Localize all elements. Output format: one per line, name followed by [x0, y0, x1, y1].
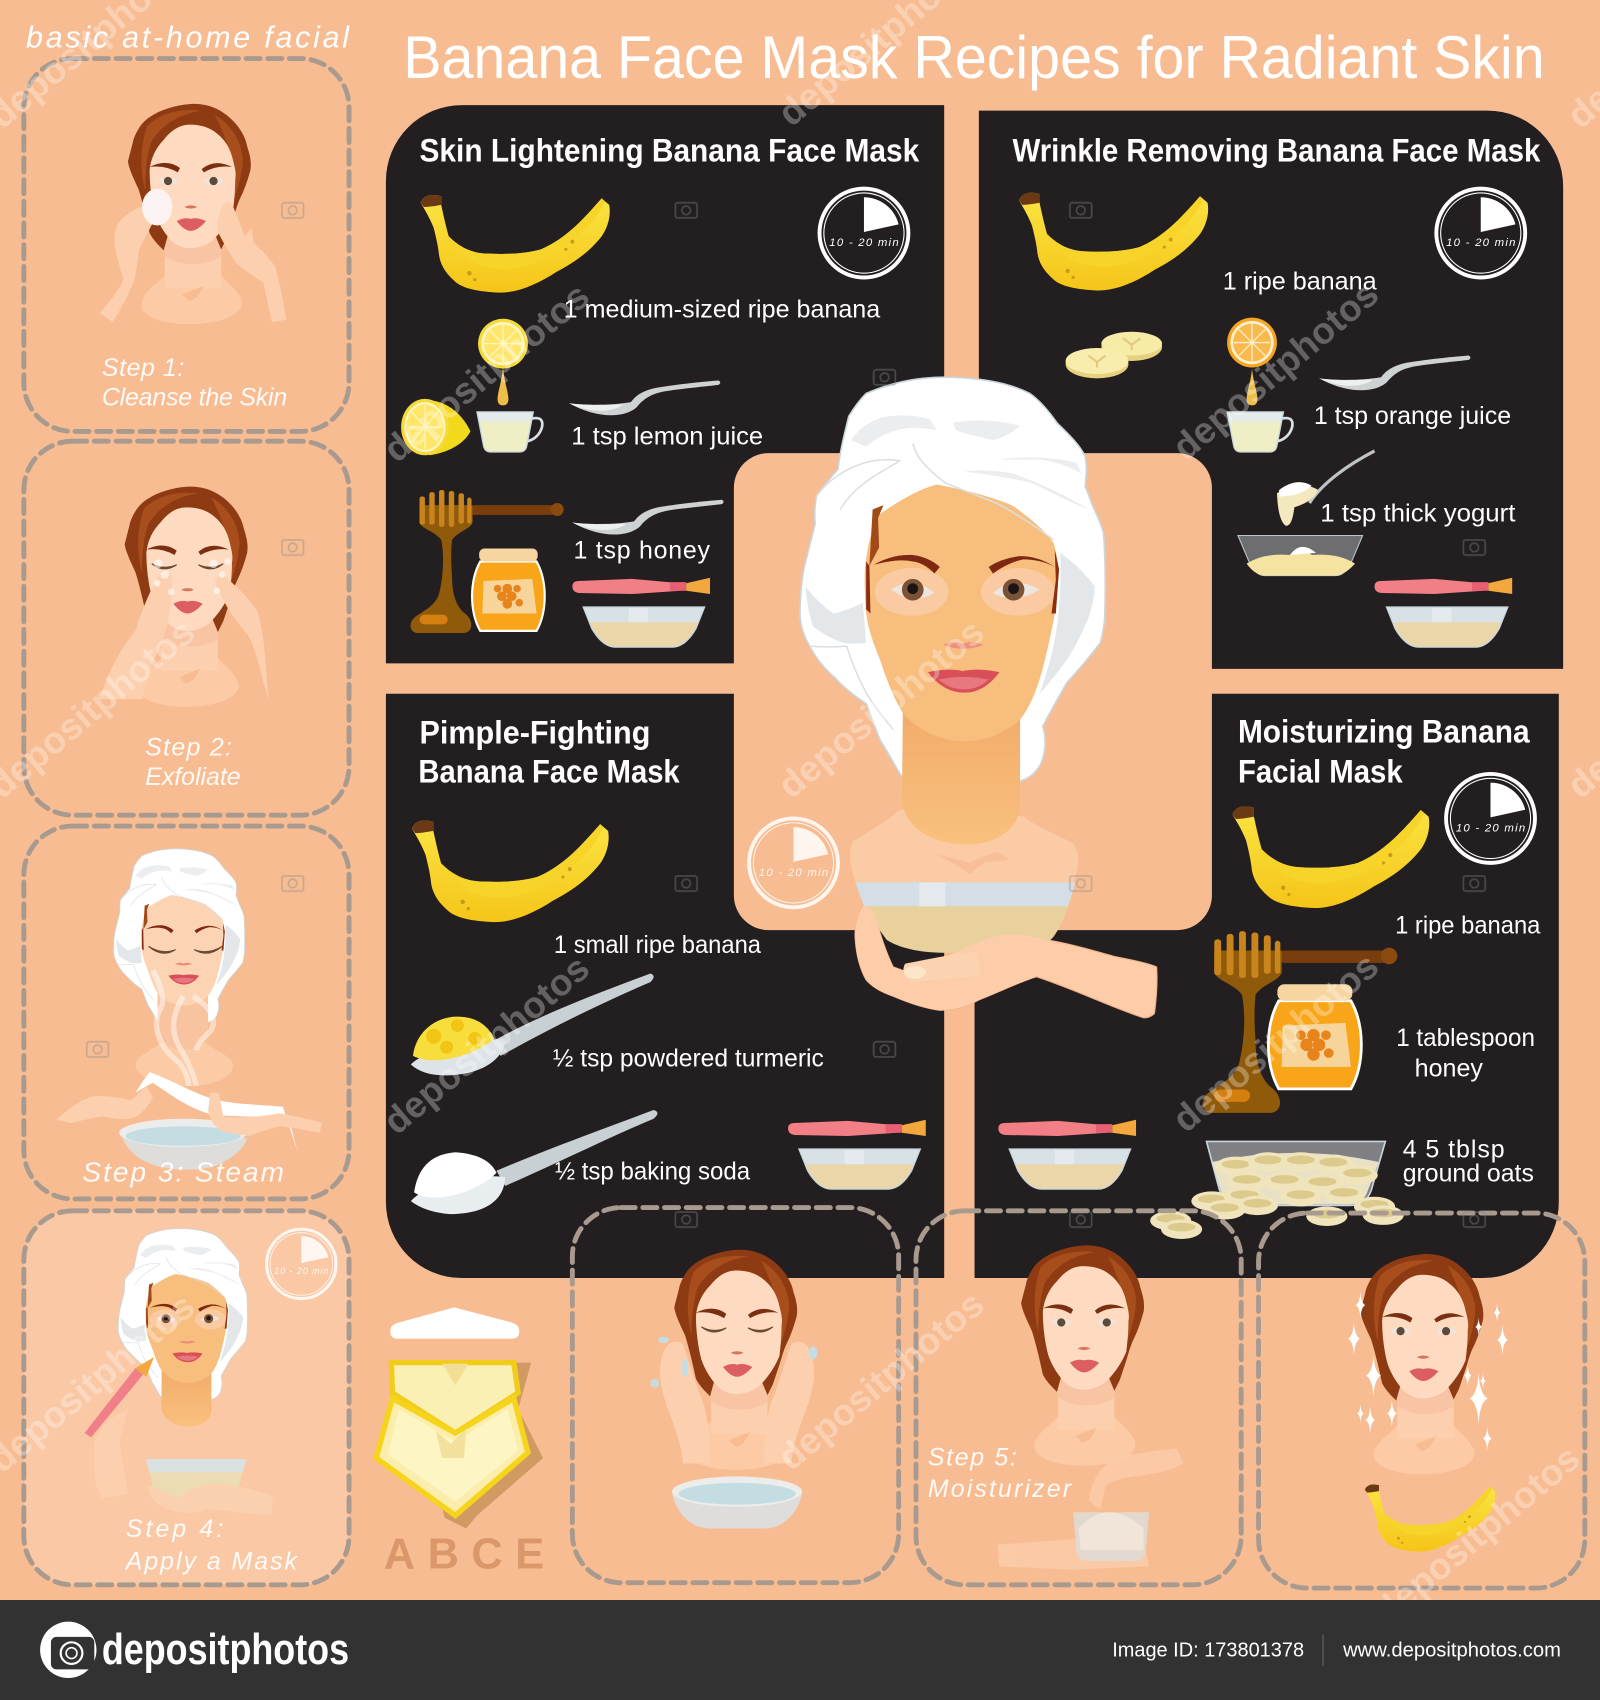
- icon: spoon: [572, 500, 724, 534]
- step 1 label: Step 1:: [102, 354, 184, 382]
- icon: spoon: [1319, 356, 1470, 390]
- moisturizer hand and jar: [997, 1448, 1184, 1570]
- step 4 label: Step 4:: [126, 1515, 223, 1543]
- watermarks: depositphotos: [1165, 945, 1386, 1140]
- step 4 towel: [118, 1229, 248, 1400]
- heading: moisturizing: [1238, 714, 1530, 790]
- image id: Image ID: 173801378: [1112, 1639, 1304, 1661]
- panel: moisturizing mask: [975, 694, 1559, 1278]
- lower slice pith: [388, 1409, 518, 1501]
- water bowl: [119, 1110, 273, 1170]
- top slice: [391, 1363, 518, 1433]
- water drops: [650, 1337, 817, 1388]
- heading: moisturizing: Moisturizing Banana: [1238, 714, 1530, 750]
- neck: [902, 694, 1020, 844]
- watermarks: depositphotos: [770, 611, 992, 806]
- step 2 label: Exfoliate: [145, 763, 241, 791]
- logo text: depositphotos: [102, 1626, 349, 1674]
- icon: orange juice: [1227, 318, 1292, 452]
- slice shadow: [412, 1363, 543, 1528]
- steam: [153, 970, 213, 1086]
- step 1 card: [24, 59, 349, 431]
- heading: pimple-fighting: Pimple-Fighting: [420, 715, 650, 751]
- eyes: [891, 579, 1040, 601]
- step 2 hands: [100, 569, 269, 699]
- icon: banana: [421, 195, 610, 293]
- nose and lips: [928, 642, 999, 693]
- heading: pimple-fighting: Banana Face Mask: [418, 754, 680, 790]
- face: [865, 485, 1058, 741]
- icon: bowl: [1386, 607, 1508, 647]
- icon: banana: [1019, 193, 1208, 291]
- step 3 face: [141, 895, 225, 1005]
- panel: skin lightening mask: [386, 105, 944, 663]
- rinse hands: [660, 1342, 814, 1463]
- step 2 woman: [125, 487, 248, 707]
- radiant woman: [1360, 1254, 1483, 1474]
- watermarks: depositphotos: [376, 947, 597, 1142]
- timer: 10 - 20 min: [274, 1266, 328, 1276]
- step 1 label: Cleanse the Skin: [102, 383, 287, 411]
- icon: banana: [1233, 806, 1429, 908]
- timer: [267, 1229, 336, 1299]
- ingredient: honey: 1 tsp honey: [573, 536, 711, 564]
- ingredient: banana: 1 ripe banana: [1223, 267, 1377, 295]
- logo icon: [40, 1622, 96, 1678]
- step 3 towel shading: [116, 865, 240, 1000]
- step 3 brows: [142, 904, 225, 950]
- eyebrows and hair wisps: [866, 505, 1059, 614]
- divider: [1322, 1635, 1324, 1666]
- icon: bowl of oats: [1150, 1141, 1404, 1239]
- top slice seed: [442, 1364, 468, 1385]
- towel shading: [120, 1245, 243, 1378]
- step 3 closed eyes: [149, 946, 222, 953]
- step 4 label: [124, 1515, 299, 1576]
- hand and arm: [855, 906, 1157, 1018]
- step 5 label: Step 5:: [928, 1444, 1017, 1472]
- ingredient: baking soda: ½ tsp baking soda: [555, 1157, 750, 1185]
- center panel with towel woman: [734, 377, 1212, 1018]
- soap foam: [154, 558, 231, 595]
- icon: brush: [788, 1120, 926, 1136]
- icon: cotton pad: [142, 189, 172, 225]
- icon: turmeric spoon: [411, 973, 654, 1075]
- icon: brush: [572, 578, 710, 594]
- lower slice: [376, 1398, 528, 1515]
- watermark cameras: [87, 203, 1485, 1227]
- icon: bowl: [1009, 1149, 1131, 1189]
- step 4 label: Apply a Mask: [124, 1548, 299, 1576]
- heading: pimple-fighting: [418, 715, 680, 790]
- step 5 woman: [1021, 1245, 1144, 1466]
- footer bar: [0, 1600, 1600, 1700]
- rinse card: [572, 1208, 899, 1583]
- heading: wrinkle removing: Wrinkle Removing Banana Face Mask: [1012, 133, 1541, 169]
- eye patches: [150, 1309, 226, 1330]
- step 1 woman: [128, 104, 251, 324]
- ingredient: honey: honey: [1415, 1054, 1483, 1082]
- icon: bowl: [799, 1149, 920, 1189]
- timer: [1436, 189, 1525, 278]
- shoulders: [136, 1043, 233, 1086]
- step 1 label: [102, 354, 287, 411]
- step 4 masked face: [146, 1274, 228, 1383]
- ingredient: yogurt: 1 tsp thick yogurt: [1320, 499, 1516, 527]
- shoulders: [850, 810, 1078, 883]
- vitamins letters: ABCE: [384, 1531, 544, 1579]
- icon: banana: [1365, 1484, 1495, 1552]
- icon: bowl: [583, 607, 705, 647]
- panel: pimple-fighting mask: [386, 694, 944, 1278]
- ingredient: honey: [1396, 1024, 1535, 1082]
- eye patches: [875, 568, 1055, 616]
- subtitle: basic at-home facial: [26, 22, 350, 55]
- ingredient: oats: [1403, 1136, 1534, 1188]
- timer: [1446, 774, 1535, 863]
- watermarks: depositphotos: [1366, 1437, 1588, 1632]
- icon: banana: [412, 821, 609, 922]
- timer: 10 - 20 min: [1446, 237, 1515, 249]
- ingredient: banana: 1 ripe banana: [1395, 911, 1541, 939]
- ingredient: banana: 1 medium-sized ripe banana: [564, 296, 880, 324]
- step 3 towel: [113, 849, 245, 1023]
- watermarks: depositphotos: [376, 275, 597, 470]
- towel draped: [136, 1072, 297, 1150]
- water bowl: [672, 1476, 802, 1528]
- step 4 eyes: [157, 1314, 220, 1323]
- banana slice mask: [376, 1307, 543, 1528]
- ingredient: banana: 1 small ripe banana: [554, 931, 761, 959]
- icon: honey dipper and jar: [411, 490, 564, 633]
- step 4 card: [24, 1211, 349, 1585]
- bowl: [855, 882, 1075, 953]
- palm and arm over bowl: [855, 906, 1054, 1010]
- ingredient: honey: 1 tablespoon: [1396, 1024, 1535, 1052]
- icon: glass bowl with banana: [1238, 536, 1363, 576]
- icon: honey dipper and jar: [1203, 931, 1397, 1113]
- step 1 hands: [100, 202, 286, 322]
- white cap: [390, 1307, 519, 1339]
- ingredient: oats: 4 5 tblsp: [1403, 1136, 1505, 1164]
- icon: brush: [1375, 578, 1512, 594]
- hands: [56, 1086, 322, 1137]
- sparkles: [1348, 1291, 1508, 1451]
- step 4 bowl and hand: [146, 1459, 273, 1515]
- ingredient: lemon juice: 1 tsp lemon juice: [571, 422, 763, 450]
- title: Banana Face Mask Recipes for Radiant Skin: [403, 23, 1545, 91]
- timer: [749, 818, 838, 907]
- step 3 card: [24, 826, 349, 1199]
- step 2 label: Step 2:: [145, 734, 232, 762]
- brush in hand: [85, 1357, 154, 1498]
- website: www.depositphotos.com: [1342, 1639, 1561, 1661]
- panel: wrinkle removing mask: [979, 111, 1563, 669]
- icon: brush: [998, 1120, 1136, 1136]
- icon: banana slices: [1066, 332, 1162, 378]
- step 2 label: [145, 734, 241, 791]
- heading: moisturizing: Facial Mask: [1238, 754, 1404, 790]
- step 4 neck: [161, 1363, 211, 1426]
- lower slice seed: [436, 1429, 466, 1458]
- icon: baking soda spoon: [411, 1110, 657, 1214]
- ingredient: oats: ground oats: [1403, 1160, 1534, 1188]
- timer: 10 - 20 min: [829, 237, 899, 249]
- collarbone: [938, 852, 1010, 874]
- step 5 label: [928, 1444, 1073, 1503]
- ingredient: turmeric: ½ tsp powdered turmeric: [553, 1045, 824, 1073]
- heading: skin lightening: Skin Lightening Banana Face Mask: [420, 133, 920, 169]
- timer: 10 - 20 min: [759, 867, 828, 879]
- watermarks: depositphotos: [1165, 273, 1386, 468]
- step 3 neck: [157, 985, 208, 1050]
- towel: [800, 377, 1105, 782]
- towel shading: [805, 415, 1095, 730]
- step 3 mouth: [168, 963, 199, 984]
- icon: spoon: [569, 380, 720, 415]
- timer: 10 - 20 min: [1456, 822, 1525, 834]
- watermarks: depositphotos: [770, 1283, 992, 1478]
- ingredient: orange juice: 1 tsp orange juice: [1314, 402, 1511, 430]
- step 5 card: [916, 1211, 1241, 1585]
- step 4 mouth: [172, 1341, 203, 1362]
- rinse woman: [674, 1250, 797, 1470]
- step 3 label: Step 3: Steam: [82, 1156, 284, 1188]
- timer: [820, 189, 908, 278]
- icon: lemon juice: [401, 319, 542, 455]
- radiant skin card: [1259, 1213, 1585, 1588]
- thumbnail: [904, 966, 926, 979]
- step 5 label: Moisturizer: [928, 1475, 1073, 1503]
- icon: yogurt spoon: [1277, 451, 1375, 526]
- step 2 card: [24, 441, 349, 815]
- thumb: [903, 952, 981, 982]
- step 4 brows: [146, 1283, 228, 1329]
